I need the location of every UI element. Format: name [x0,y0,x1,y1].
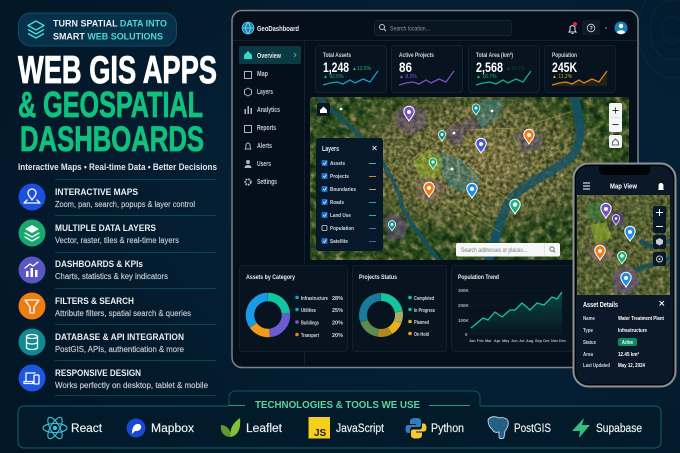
icon: layers [28,21,44,38]
asset details panel: Asset Details [583,302,618,309]
sidebar navigation: Layers [257,89,273,96]
legend: assets: 20% [332,333,343,339]
sidebar navigation: Reports [257,125,276,132]
KPI card: total area: ▲10.7% [506,66,526,72]
feature: database and API integration: PostGIS, APIs, authentication & more [55,345,185,354]
legend: assets: Transport [301,333,319,339]
tool: Leaflet [221,418,283,437]
panel: projects status: Projects Status [359,274,397,281]
KPI card: total assets: ▲12.5% [352,66,372,72]
badge text: SMART WEB SOLUTIONS [53,32,163,42]
feature: responsive design: Works perfectly on desktop, tablet & mobile [55,381,209,390]
technologies panel [18,391,661,448]
line chart: population [458,288,568,343]
line chart: population: Apr [494,339,501,343]
icon: help button: ? [590,26,594,32]
legend: assets: Infrastructure [301,296,328,302]
tool: Supabase: Supabase [596,423,642,435]
line chart: population: 200K [458,303,470,308]
KPI card: total area: 2,568 [476,59,503,75]
legend: assets: 28% [332,296,343,302]
badge text: TURN SPATIAL DATA INTO [53,18,167,30]
line chart: population: 300K [458,288,470,293]
tool: Mapbox: Mapbox [151,423,194,435]
feature: filters and search [18,292,191,320]
legend: projects: In Progress [414,308,435,314]
KPI card: population: 245K [552,59,577,75]
line chart: population: Oct [543,339,550,343]
search bar [374,20,512,36]
KPI card: population: ▲ 11.2% [552,74,573,80]
phone mockup [574,164,676,386]
legend: projects: Completed [414,296,434,302]
layers panel: Satellite [330,239,348,245]
legend: assets: 20% [332,320,343,326]
layers panel: Projects [330,174,349,180]
layers panel [316,138,383,251]
panel: assets by category: Assets by Category [246,274,295,281]
phone map pins [595,203,635,287]
layers panel: Layers [322,146,339,153]
KPI card: active projects: Active Projects [399,53,435,59]
line chart: population: Jan [469,339,476,343]
KPI card: total assets: ▲ 92.5% [323,74,344,80]
sidebar navigation: Analytics [257,107,280,114]
asset details panel: Name [583,316,595,322]
KPI card: active projects [392,46,462,92]
roads [310,100,570,232]
feature: dashboards and KPIs: DASHBOARDS & KPIs [55,259,143,270]
KPI card: total assets: Total Assets [323,53,352,59]
panel: population trend: Population Trend [458,274,499,281]
layers panel: Population [330,226,355,232]
line chart: population: Jun [511,339,518,343]
KPI card: total assets: 1,248 [323,59,349,75]
title [18,49,217,159]
sidebar navigation: Settings [257,179,277,186]
tool: JavaScript: JavaScript [336,423,385,435]
sidebar navigation: Users [257,161,271,168]
KPI card: total area: ▲ 16.7% [476,74,497,80]
feature: multiple data layers: Vector, raster, tiles & real-time layers [55,236,179,245]
sidebar navigation: Overview [257,53,281,60]
title: DASHBOARDS [20,120,204,159]
sidebar navigation [239,46,301,186]
tool: React [43,415,103,441]
feature: filters and search: FILTERS & SEARCH [55,296,134,307]
asset details panel: Active [622,340,633,346]
tool: Supabase [572,418,642,438]
zoom controls [609,103,622,148]
line chart: population: May [502,339,510,343]
feature: interactive maps [18,184,195,210]
tool: PostGIS: PostGIS [514,423,551,435]
asset details panel: Water Treatment Plant [618,316,664,322]
sidebar navigation: Map [257,71,268,78]
line chart: population: Aug [526,339,534,343]
KPI card: total assets [316,46,386,92]
line chart: population: 0 [465,332,468,337]
dashboard window [232,10,638,368]
line chart: population: Jul [519,339,524,343]
feature: multiple data layers: MULTIPLE DATA LAYERS [55,223,156,234]
title: & GEOSPATIAL [18,84,203,125]
asset details panel: Last Updated [583,363,610,369]
icon: globe logo [242,22,254,34]
search bar: Search location... [390,26,430,32]
asset details panel: Area [583,352,594,358]
asset details panel: May 12, 2024 [618,363,646,369]
tool: JavaScript [308,417,385,439]
icon: help button [582,20,600,35]
KPI card: population [544,46,616,92]
feature: multiple data layers [18,220,179,246]
legend: projects: On Hold [414,332,429,338]
KPI card: total area [468,46,540,92]
badge: turn spatial data into smart web solutions [18,13,176,46]
badge text [53,18,167,42]
tool: Python [406,418,464,438]
tool: React: React [71,423,103,435]
title: WEB GIS APPS [18,49,217,92]
phone header [583,183,664,190]
KPI card: active projects: ▲ 8.3% [399,74,417,80]
feature: interactive maps: INTERACTIVE MAPS [55,187,138,198]
line chart: population: Feb [477,339,484,343]
feature: filters and search: Attribute filters, spatial search & queries [55,309,191,318]
panel: population trend [452,266,576,352]
line chart: population: Mar [485,339,492,343]
phone map controls [653,206,666,266]
line chart: population: Nov [551,339,559,343]
sidebar navigation: Alerts [257,143,272,150]
map search box: Search addresses or places... [461,248,527,254]
asset details panel: 12.45 km² [618,351,639,358]
map search box [456,243,560,256]
legend: projects: Planned [414,320,429,326]
asset details panel: Type [583,328,593,334]
KPI card: population: Population [552,53,577,59]
icon: user avatar [614,22,628,34]
donut chart: projects [356,290,406,340]
KPI card: total area: Total Area (km²) [476,52,513,59]
panel: projects status [352,266,446,352]
line chart: population: 100K [458,318,470,323]
legend: assets: Utilities [301,308,316,314]
line chart: population: Dec [559,339,566,343]
layers panel: Assets [330,161,345,167]
legend: assets: Buildings [301,320,319,326]
panel: assets by category [240,266,348,352]
feature: interactive maps: Zoom, pan, search, popups & layer control [55,200,195,209]
feature: dashboards and KPIs [18,256,168,284]
feature: responsive design: RESPONSIVE DESIGN [55,368,141,379]
tool: Leaflet: Leaflet [246,423,283,435]
main map [310,90,629,264]
layers panel: Boundaries [330,187,356,193]
asset details panel: Status [583,340,596,346]
feature: responsive design [18,364,209,392]
tool: Python: Python [431,423,464,435]
tool: Mapbox [126,418,194,438]
map pins [340,104,534,231]
tool: PostGIS [488,417,551,438]
feature: database and API integration [18,328,185,356]
phone header: Map View [610,184,637,190]
thematic land-use areas [384,100,544,240]
dashboard header [242,20,627,36]
tool: JavaScript: JS [314,428,327,439]
donut chart: assets [243,290,293,340]
KPI card: active projects: 86 [399,59,412,75]
layers panel: Roads [330,200,344,206]
rivers [318,90,580,264]
feature: dashboards and KPIs: Charts, statistics & key indicators [55,272,168,281]
legend: projects [408,296,435,338]
legend: assets: 25% [332,308,343,314]
phone map [577,195,672,295]
asset details panel [583,301,664,369]
asset details panel: Infrastructure [618,328,647,334]
feature: database and API integration: DATABASE & API INTEGRATION [55,332,184,343]
icon: notification bell [569,22,577,34]
legend: assets [295,296,343,339]
heading: technologies and tools: TECHNOLOGIES & TOOLS WE USE [255,400,420,411]
layers panel: Land Use [330,213,351,219]
map home button [317,103,330,116]
tagline: Interactive Maps • Real-time Data • Better Decisions [18,162,217,172]
line chart: population: Sep [535,339,543,343]
dashboard header: GeoDashboard [257,24,299,33]
